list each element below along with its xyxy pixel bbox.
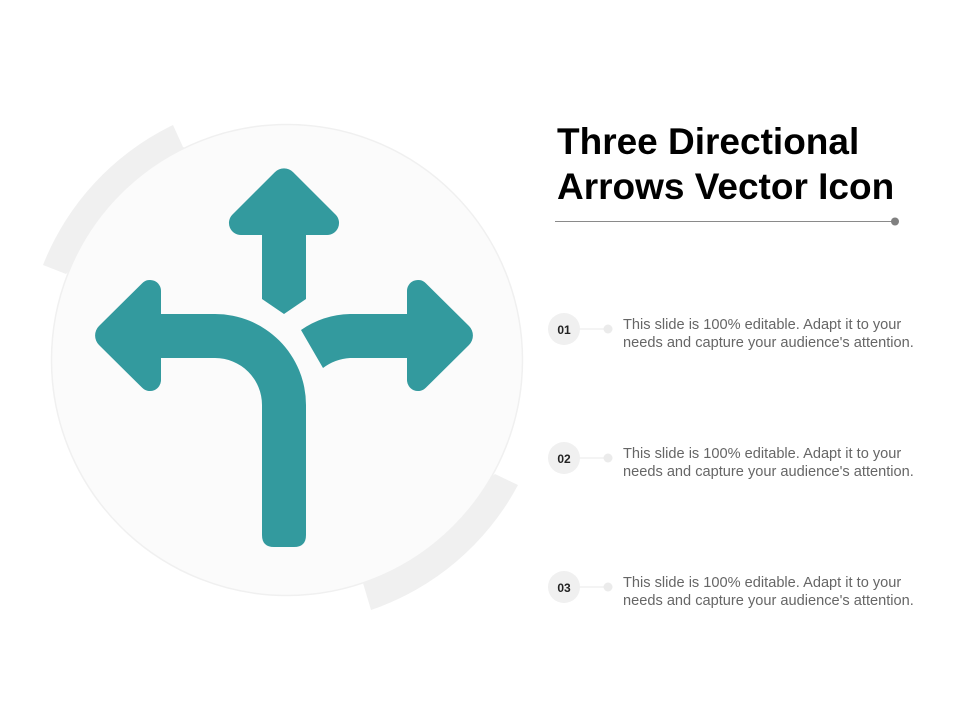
item 03	[548, 571, 914, 609]
item 01	[548, 313, 914, 351]
item 02	[548, 442, 914, 480]
item 03: needs and capture your audience's attention.	[623, 593, 914, 609]
item 02: 02	[557, 452, 571, 466]
item 02: needs and capture your audience's attention.	[623, 464, 914, 480]
main circle	[52, 124, 522, 596]
arrow: up	[229, 168, 339, 314]
item 01: 01	[557, 323, 571, 337]
arrow: right	[301, 280, 473, 391]
arc: lower right decoration	[363, 474, 518, 610]
arrow: left turning into stem	[95, 280, 306, 547]
title: Arrows Vector Icon	[557, 166, 894, 207]
title divider	[555, 218, 899, 226]
title: Three Directional	[557, 121, 859, 162]
item 02: This slide is 100% editable. Adapt it to your	[623, 446, 901, 462]
item 03: This slide is 100% editable. Adapt it to your	[623, 575, 901, 591]
item 01: This slide is 100% editable. Adapt it to your	[623, 317, 901, 333]
item 03: 03	[557, 581, 571, 595]
arc: upper left decoration	[43, 125, 190, 274]
icon: three directional arrows	[95, 168, 473, 547]
item 01: needs and capture your audience's attention.	[623, 335, 914, 351]
